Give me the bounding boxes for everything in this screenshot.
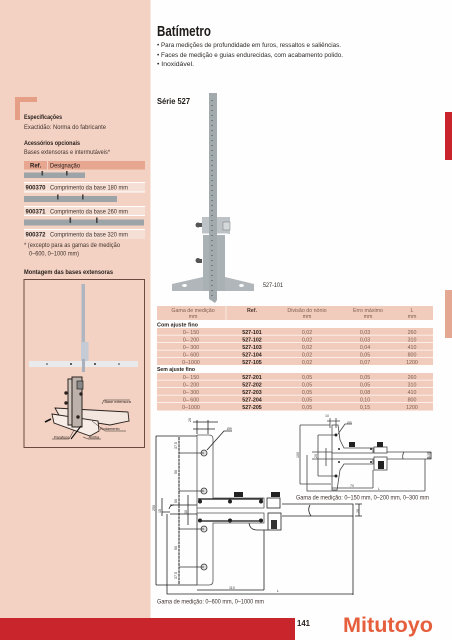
rows: with fine adjustment: 0,02 — [302, 345, 312, 351]
group heading: without fine adjustment: Sem ajuste fino — [157, 367, 195, 373]
photo: assembled gauge — [29, 284, 138, 372]
rows: with fine adjustment: 527-101 — [242, 330, 262, 336]
diagram: large range drawing — [156, 420, 353, 595]
labels: small drawing dimensions: 10 — [325, 414, 329, 418]
labels: large drawing dimensions: 37,5 — [174, 442, 178, 449]
row: 900372 — [24, 229, 145, 239]
diagram: small range drawing — [300, 418, 431, 491]
labels: small drawing dimensions: L — [378, 487, 380, 491]
rows: with fine adjustment: 527-103 — [242, 345, 262, 351]
rows: with fine adjustment — [157, 328, 433, 366]
photo: base 180 mm — [24, 171, 85, 178]
row: 900371 — [24, 206, 145, 216]
logo: Mitutoyo: Mitutoyo — [343, 614, 433, 637]
rows: without fine adjustment: 0,05 — [360, 382, 370, 388]
labels: large drawing dimensions: Ø9 — [227, 427, 232, 431]
rows: without fine adjustment: 0,05 — [302, 375, 312, 381]
title: Batímetro — [157, 24, 211, 40]
labels: small drawing dimensions — [296, 414, 431, 491]
table header: accessories: Designação — [50, 164, 81, 170]
bullet list: • Inoxidável. — [157, 61, 194, 68]
rows: without fine adjustment: 0,05 — [360, 375, 370, 381]
rows: without fine adjustment: 0,10 — [360, 398, 370, 404]
side tab: pink — [445, 290, 452, 338]
rows: without fine adjustment: 0– 300 — [183, 390, 199, 396]
labels: large drawing dimensions — [152, 418, 279, 593]
rows: without fine adjustment: 0,08 — [360, 390, 370, 396]
rows: with fine adjustment: 0– 300 — [183, 345, 199, 351]
label: 527-101: 527-101 — [263, 283, 284, 289]
rows: with fine adjustment: 0,03 — [360, 330, 370, 336]
rows: without fine adjustment: 0,05 — [302, 390, 312, 396]
table header: mm — [364, 314, 373, 320]
heading: assembly: Montagem das bases extensoras — [24, 269, 113, 276]
rows: without fine adjustment: 800 — [408, 398, 416, 404]
label: right beam dimension — [309, 504, 362, 516]
labels: large drawing dimensions: 50 — [174, 470, 178, 474]
icon: corner bracket — [15, 97, 37, 120]
rows: without fine adjustment: 0,05 — [302, 382, 312, 388]
diagram: assembly exploded view: Base extensora — [104, 400, 132, 404]
table header: L — [411, 308, 414, 314]
table header: accessories: Ref. — [30, 164, 42, 170]
rows: with fine adjustment: 0,02 — [302, 360, 312, 366]
heading: series: Série 527 — [157, 97, 191, 106]
table header: Ref. — [247, 308, 258, 314]
rows: with fine adjustment: 260 — [408, 330, 416, 336]
table header: mm — [303, 314, 312, 320]
row: 900370: 900370 — [26, 186, 46, 192]
diagram: assembly exploded view — [45, 377, 132, 440]
row: 900370 — [24, 182, 145, 192]
bullet list: • Faces de medição e guias endurecidas, com acabamento polido. — [157, 52, 343, 59]
labels: large drawing dimensions: 20 — [188, 418, 192, 422]
footnote: 0–600, 0–1000 mm) — [29, 252, 79, 258]
side tab: red — [445, 112, 452, 160]
footnote: * (excepto para as gamas de medição — [24, 243, 121, 249]
table header: mm — [189, 314, 198, 320]
table header — [157, 306, 433, 320]
bullet list — [157, 42, 343, 68]
rows: without fine adjustment: 260 — [408, 375, 416, 381]
rows: with fine adjustment: 0– 600 — [183, 352, 199, 358]
row: 900371: Comprimento da base 260 mm — [50, 210, 128, 216]
rows: with fine adjustment: 0,02 — [302, 330, 312, 336]
rows: without fine adjustment: 527-204 — [242, 398, 262, 404]
row: 900371: 900371 — [26, 210, 46, 216]
rows: with fine adjustment: 527-102 — [242, 338, 262, 344]
rows: with fine adjustment: 1200 — [406, 360, 418, 366]
rows: with fine adjustment: 0,04 — [360, 345, 370, 351]
table: specifications — [157, 306, 433, 411]
text: bases: Bases extensoras e intermutáveis* — [24, 150, 111, 156]
rows: without fine adjustment: 0– 200 — [183, 382, 199, 388]
panel: assembly figure — [24, 280, 144, 448]
labels: large drawing dimensions: L — [277, 589, 279, 593]
table header: Gama de medição — [171, 308, 215, 314]
rows: without fine adjustment: 0,15 — [360, 405, 370, 411]
labels: large drawing dimensions: 15 — [158, 509, 162, 513]
diagram: assembly exploded view: Rodamento — [100, 427, 120, 431]
labels: large drawing dimensions: 250 — [152, 505, 156, 511]
rows: without fine adjustment: 0–1000 — [182, 405, 200, 411]
rows: with fine adjustment: 0– 200 — [183, 338, 199, 344]
rows: with fine adjustment: 0,02 — [302, 352, 312, 358]
table header: Erro máximo — [353, 308, 383, 314]
footer band — [0, 618, 295, 640]
rows: without fine adjustment: 310 — [408, 382, 416, 388]
table header: accessories — [24, 161, 145, 170]
rows: without fine adjustment: 0– 150 — [183, 375, 199, 381]
group heading: with fine adjustment: Com ajuste fino — [157, 322, 198, 328]
labels: small drawing dimensions: 100 — [296, 452, 300, 458]
rows: without fine adjustment: 527-205 — [242, 405, 262, 411]
labels: large drawing dimensions: 50 — [174, 499, 178, 503]
rows: with fine adjustment: 527-104 — [242, 352, 262, 358]
heading: specifications: Especificações — [24, 114, 62, 121]
labels: small drawing dimensions: 13 — [427, 454, 431, 458]
rows: with fine adjustment: 0,03 — [360, 338, 370, 344]
diagram: assembly exploded view: Parafuso — [54, 436, 69, 440]
footnote — [24, 243, 121, 258]
labels: large drawing dimensions: 50 — [174, 546, 178, 550]
rows: with fine adjustment: 0–1000 — [182, 360, 200, 366]
rows: with fine adjustment: 0,02 — [302, 338, 312, 344]
rows: without fine adjustment: 527-203 — [242, 390, 262, 396]
page number: 141 — [297, 619, 311, 628]
rows: without fine adjustment: 0,05 — [302, 398, 312, 404]
rows: with fine adjustment: 527-105 — [242, 360, 262, 366]
table header: Divisão do nónio — [287, 308, 327, 314]
rows: with fine adjustment: 0– 150 — [183, 330, 199, 336]
labels: large drawing dimensions: 37,5 — [174, 572, 178, 579]
rows: without fine adjustment: 527-202 — [242, 382, 262, 388]
rows: without fine adjustment: 527-201 — [242, 375, 262, 381]
row: 900372: Comprimento da base 320 mm — [50, 232, 128, 238]
text: accuracy: Exactidão: Norma do fabricante — [24, 125, 107, 131]
labels: large drawing dimensions: 110 — [229, 586, 235, 590]
labels: large drawing dimensions: 30 — [184, 510, 188, 514]
heading: optional accessories: Acessórios opcionais — [24, 140, 80, 147]
rows: with fine adjustment: 800 — [408, 352, 416, 358]
rows: with fine adjustment: 310 — [408, 338, 416, 344]
row: 900370: Comprimento da base 180 mm — [50, 186, 128, 192]
labels: small drawing dimensions: 20 — [314, 454, 318, 458]
labels: small drawing dimensions: 70 — [350, 484, 354, 488]
row: 900372: 900372 — [26, 232, 46, 238]
table header: mm — [408, 314, 417, 320]
caption: large range: Gama de medição: 0–600 mm, 0–1000 mm — [157, 598, 264, 606]
diagram: assembly exploded view: Anilha — [88, 436, 100, 440]
caption: small range: Gama de medição: 0–150 mm, 0–200 mm, 0–300 mm — [296, 494, 429, 502]
rows: without fine adjustment: 0– 600 — [183, 398, 199, 404]
labels: small drawing dimensions: Ø5 — [347, 421, 352, 425]
label: right beam dimension: 20 — [356, 509, 360, 513]
rows: without fine adjustment: 410 — [408, 390, 416, 396]
photo: base 260 mm — [24, 194, 117, 202]
rows: without fine adjustment: 1200 — [406, 405, 418, 411]
rows: without fine adjustment — [157, 373, 433, 411]
photo: base 320 mm — [24, 218, 144, 226]
bullet list: • Para medições de profundidade em furos, ressaltos e saliências. — [157, 42, 341, 49]
rows: with fine adjustment: 410 — [408, 345, 416, 351]
rows: with fine adjustment: 0,07 — [360, 360, 370, 366]
rows: without fine adjustment: 0,05 — [302, 405, 312, 411]
photo: depth gauge — [172, 93, 254, 303]
rows: with fine adjustment: 0,05 — [360, 352, 370, 358]
